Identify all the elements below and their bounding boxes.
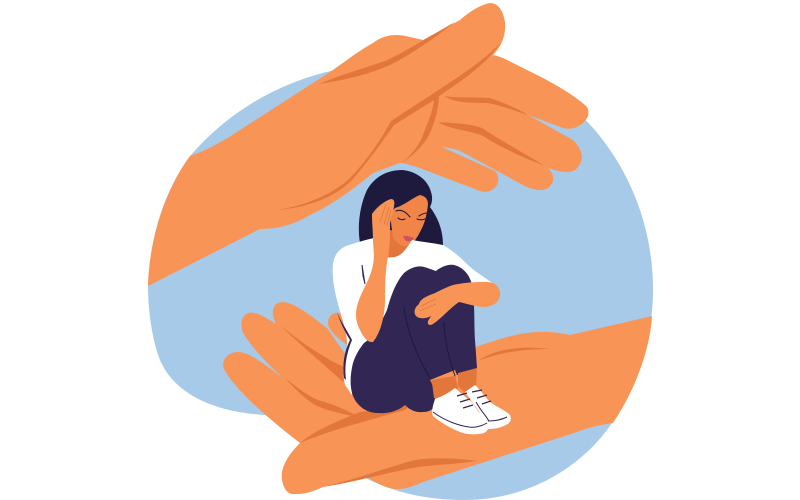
wrist crease	[477, 348, 550, 362]
shirt	[333, 238, 498, 395]
thumb web crease	[277, 43, 500, 210]
front shoe	[432, 388, 488, 434]
eyebrows and closed eyes	[396, 210, 427, 220]
pants	[351, 265, 477, 413]
shirt shadow lines	[337, 312, 352, 380]
pants fold lines	[404, 308, 455, 378]
arm raised to head	[356, 199, 394, 342]
small finger behind figure	[328, 313, 362, 352]
ankles	[431, 376, 458, 402]
forearm on knee	[415, 282, 500, 325]
finger crease 2	[438, 122, 545, 166]
finger crease 2	[285, 378, 358, 417]
hair	[359, 170, 443, 250]
finger crease 1	[280, 325, 347, 382]
finger lines on forearm hand	[420, 299, 436, 311]
palm and fingers	[223, 302, 652, 494]
lips	[403, 236, 414, 241]
woman	[333, 170, 511, 434]
face	[390, 195, 428, 246]
neck	[376, 225, 412, 258]
palm crease lower	[323, 458, 478, 487]
top hand	[148, 3, 588, 286]
thumb crease top	[319, 22, 455, 84]
palm and fingers	[148, 3, 588, 286]
back shoe	[465, 385, 511, 429]
finger lines on raised hand	[380, 204, 391, 226]
finger crease 1	[444, 96, 528, 115]
bottom hand	[223, 302, 652, 494]
blue background blob	[148, 70, 653, 500]
palm crease under figure	[300, 404, 410, 443]
